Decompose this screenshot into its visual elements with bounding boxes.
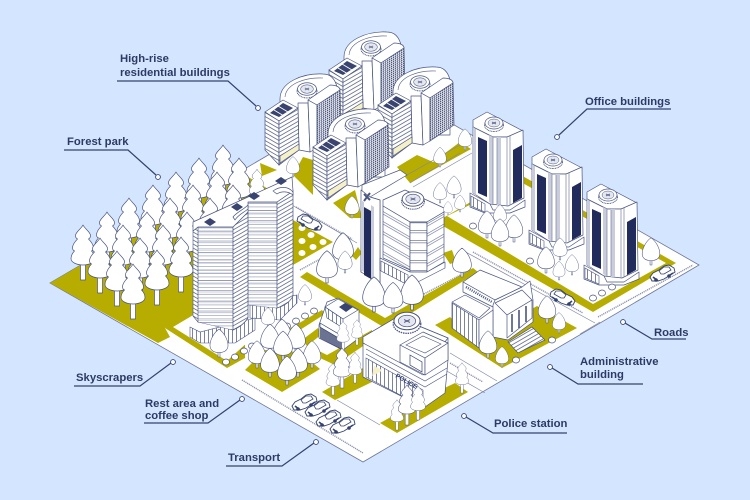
police station lawn: [380, 383, 468, 433]
high-rise residential buildings: [265, 32, 454, 200]
road lines: [242, 145, 693, 453]
rest area lawns: [245, 310, 372, 400]
label: skyscrapers: Skyscrapers: [76, 372, 143, 384]
central lot strips: [300, 247, 478, 328]
label: high-rise residential buildings: High-rise: [120, 53, 169, 65]
garden shrubs: [298, 225, 326, 256]
transport: [292, 214, 675, 434]
label: rest area and coffee shop: Rest area and: [145, 398, 219, 410]
label: forest park: [64, 136, 160, 179]
label: high-rise residential buildings: residential buildings: [120, 67, 230, 79]
skyscrapers: [190, 177, 297, 343]
right tower: [248, 191, 297, 320]
label: administrative building: building: [580, 369, 624, 381]
tower roof plate: [193, 177, 293, 231]
residential lawns: [260, 142, 471, 218]
administrative building: [452, 270, 545, 353]
dark narrow tower: [361, 170, 407, 283]
left tower: [190, 212, 255, 343]
rest area and coffee shop: [319, 298, 359, 350]
label: rest area and coffee shop: [144, 397, 244, 423]
label: police station: [462, 414, 568, 433]
police sign: POLICE: [394, 373, 419, 391]
police station: [363, 312, 448, 407]
olive garden with shrubs: [293, 220, 333, 265]
trees around residential lots: [286, 129, 472, 218]
label: high-rise residential buildings: [117, 53, 260, 110]
label: transport: Transport: [228, 452, 280, 464]
label: administrative building: Administrative: [580, 356, 658, 368]
teardrop trees, office lot: [333, 176, 660, 301]
label: forest park: Forest park: [67, 136, 129, 148]
base plate: [50, 86, 699, 462]
office lot border: [443, 174, 676, 312]
trees by rest area: [210, 285, 363, 395]
roof edge curves: [273, 187, 293, 195]
label: office buildings: [555, 96, 671, 139]
label: administrative building: [548, 356, 658, 384]
skyscraper lot edge: [165, 306, 245, 368]
label: roads: [621, 320, 689, 339]
forest park lawn: [50, 172, 270, 343]
administrative lawn: [435, 306, 577, 368]
office buildings: [470, 112, 639, 285]
central tower: [380, 190, 445, 286]
central lot trees: [317, 251, 423, 313]
label: rest area and coffee shop: coffee shop: [145, 410, 208, 422]
forest park trees: [71, 145, 265, 319]
trees by police station: [390, 363, 469, 430]
trees by administrative building: [479, 296, 566, 367]
label: skyscrapers: [74, 360, 175, 386]
label: office buildings: Office buildings: [585, 96, 670, 108]
label: roads: Roads: [654, 327, 689, 339]
city ground: [50, 86, 699, 462]
label: transport: [226, 440, 318, 466]
solar panels: [204, 177, 287, 226]
label: police station: Police station: [494, 418, 568, 430]
